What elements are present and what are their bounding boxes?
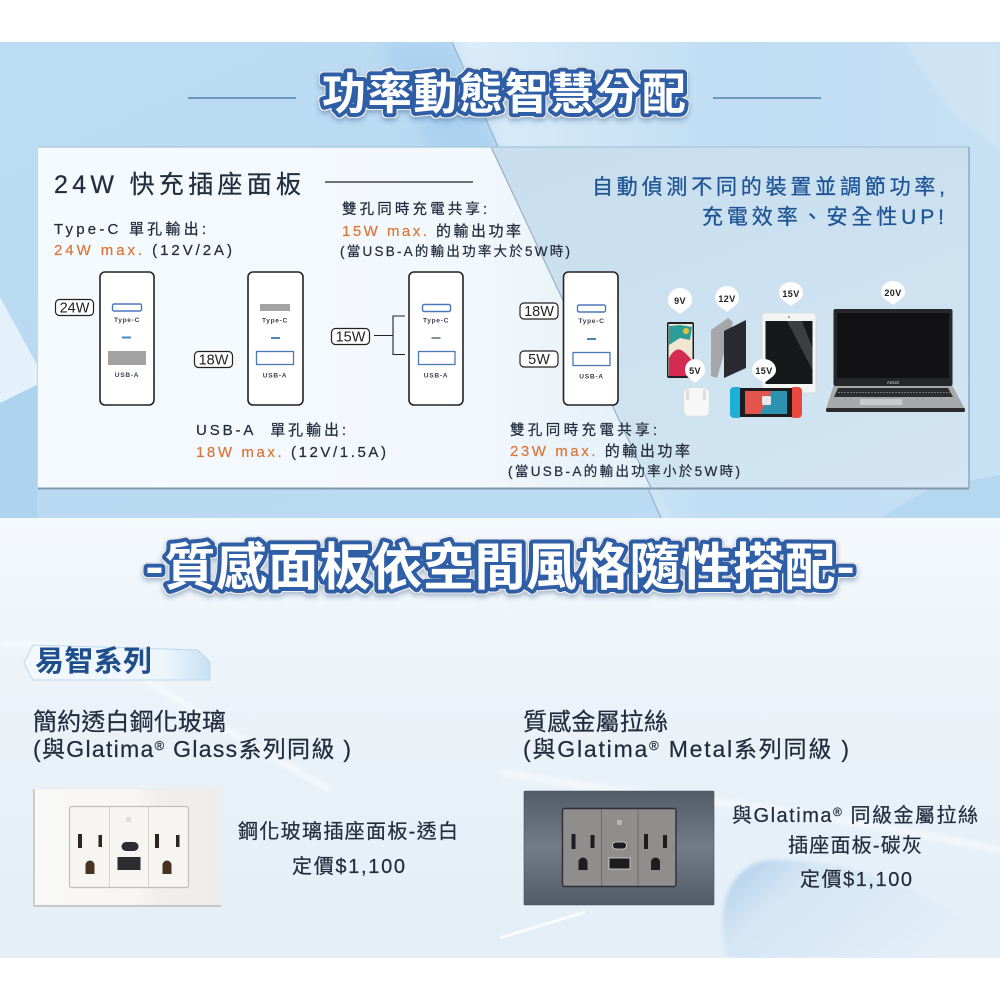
title: power allocation: 功率動態智慧分配: [322, 58, 686, 122]
title: panel style matching: -質感面板依空間風格隨性搭配-: [145, 526, 855, 600]
text: auto detect callout: [592, 176, 945, 229]
diagram: Type-C only 24W: [56, 272, 154, 405]
diagram: both ports shared 15W: USB-A: [424, 372, 448, 380]
diagram: both ports 18W and 5W: Type-C: [578, 318, 605, 325]
icon: tablet: [762, 313, 816, 393]
diagram: USB-A only 18W: 18W: [199, 352, 229, 368]
diagram: USB-A only 18W: [194, 272, 303, 405]
text: metal panel price: 插座面板-碳灰: [788, 834, 922, 857]
panel: 24W fast charging: [38, 147, 969, 488]
voltage bubbles: [668, 281, 905, 383]
icon: laptop: [826, 309, 965, 412]
text: USB-A single port: 18W max. (12V/1.5A): [196, 444, 386, 461]
voltage bubbles: 20V: [884, 288, 902, 298]
text: glass series: [33, 709, 351, 762]
diagram: Type-C only 24W: USB-A: [115, 372, 139, 379]
text: metal panel price: 同級金屬拉絲: [843, 804, 978, 827]
text: dual port share 15W: 雙孔同時充電共享:: [342, 201, 487, 218]
text: dual port share 23W: (當USB-A的輸出功率小於5W時): [508, 463, 740, 479]
icon: earbuds case: [684, 388, 709, 416]
panel heading: 24W 快充插座面板: [54, 171, 301, 199]
icon: power bank: [711, 318, 746, 378]
voltage bubbles: 15V: [782, 289, 800, 299]
product: white glass panel: [34, 789, 221, 906]
text: dual port share 15W: 15W max. 的輸出功率: [342, 223, 521, 240]
text: auto detect callout: 充電效率、安全性UP!: [702, 206, 944, 229]
text: dual port share 23W: [508, 422, 740, 479]
text: Type-C max output: 24W max. (12V/2A): [54, 242, 232, 259]
series tag: 易智系列: [35, 645, 152, 678]
icon: laptop: ASUS: [887, 380, 899, 385]
diagram: USB-A only 18W: USB-A: [263, 372, 287, 380]
text: USB-A single port: USB-A 單孔輸出:: [196, 422, 346, 439]
text: glass series: Glass系列同級 ): [166, 736, 351, 762]
diagram: both ports shared 15W: Type-C: [423, 318, 449, 324]
background: lower light section: [0, 518, 1000, 1000]
text: USB-A single port: [196, 422, 386, 461]
text: metal panel price: 與Glatima: [732, 805, 832, 827]
text: dual port share 15W: (當USB-A的輸出功率大於5W時): [340, 243, 570, 259]
text: glass panel price: 定價$1,100: [292, 855, 405, 878]
text: metal panel price: ®: [833, 805, 842, 819]
text: glass panel price: [238, 820, 458, 878]
diagram: both ports shared 15W: 15W: [336, 330, 366, 346]
diagram: both ports 18W and 5W: 5W: [528, 352, 550, 368]
text: glass series: 簡約透白鋼化玻璃: [33, 709, 226, 736]
text: auto detect callout: 自動偵測不同的裝置並調節功率,: [592, 176, 945, 199]
background: upper blue section: [0, 0, 1000, 518]
product: carbon grey metal panel: [524, 791, 714, 905]
diagram: both ports 18W and 5W: USB-A: [579, 374, 604, 380]
text: metal series: ®: [649, 738, 659, 753]
text: metal series: Metal系列同級 ): [661, 736, 849, 762]
text: metal series: 質感金屬拉絲: [523, 709, 668, 736]
text: metal series: (與Glatima: [523, 736, 647, 762]
voltage bubbles: 9V: [674, 296, 686, 306]
diagram: both ports 18W and 5W: [520, 272, 618, 405]
diagram: Type-C only 24W: Type-C: [114, 317, 140, 324]
series tag: [24, 645, 210, 680]
diagram: both ports 18W and 5W: 18W: [524, 304, 554, 320]
text: metal panel price: [732, 804, 978, 891]
voltage bubbles: 5V: [689, 366, 701, 376]
text: Type-C single port: Type-C 單孔輸出:: [54, 221, 206, 238]
voltage bubbles: 12V: [718, 294, 736, 304]
diagram: USB-A only 18W: Type-C: [262, 318, 288, 324]
text: dual port share 23W: 23W max. 的輸出功率: [510, 443, 690, 460]
text: dual port share 23W: 雙孔同時充電共享:: [510, 422, 657, 439]
diagram: Type-C only 24W: 24W: [60, 300, 90, 316]
icon: game console: [730, 387, 802, 418]
text: glass panel price: 鋼化玻璃插座面板-透白: [238, 820, 458, 843]
diagram: both ports shared 15W: [332, 272, 463, 405]
text: metal panel price: 定價$1,100: [800, 868, 912, 891]
text: dual port share 15W: [340, 201, 570, 259]
text: glass series: (與Glatima: [33, 736, 153, 762]
text: metal series: [523, 709, 849, 762]
icon: phone: [667, 322, 694, 378]
text: glass series: ®: [155, 738, 165, 753]
voltage bubbles: 15V: [755, 366, 773, 376]
